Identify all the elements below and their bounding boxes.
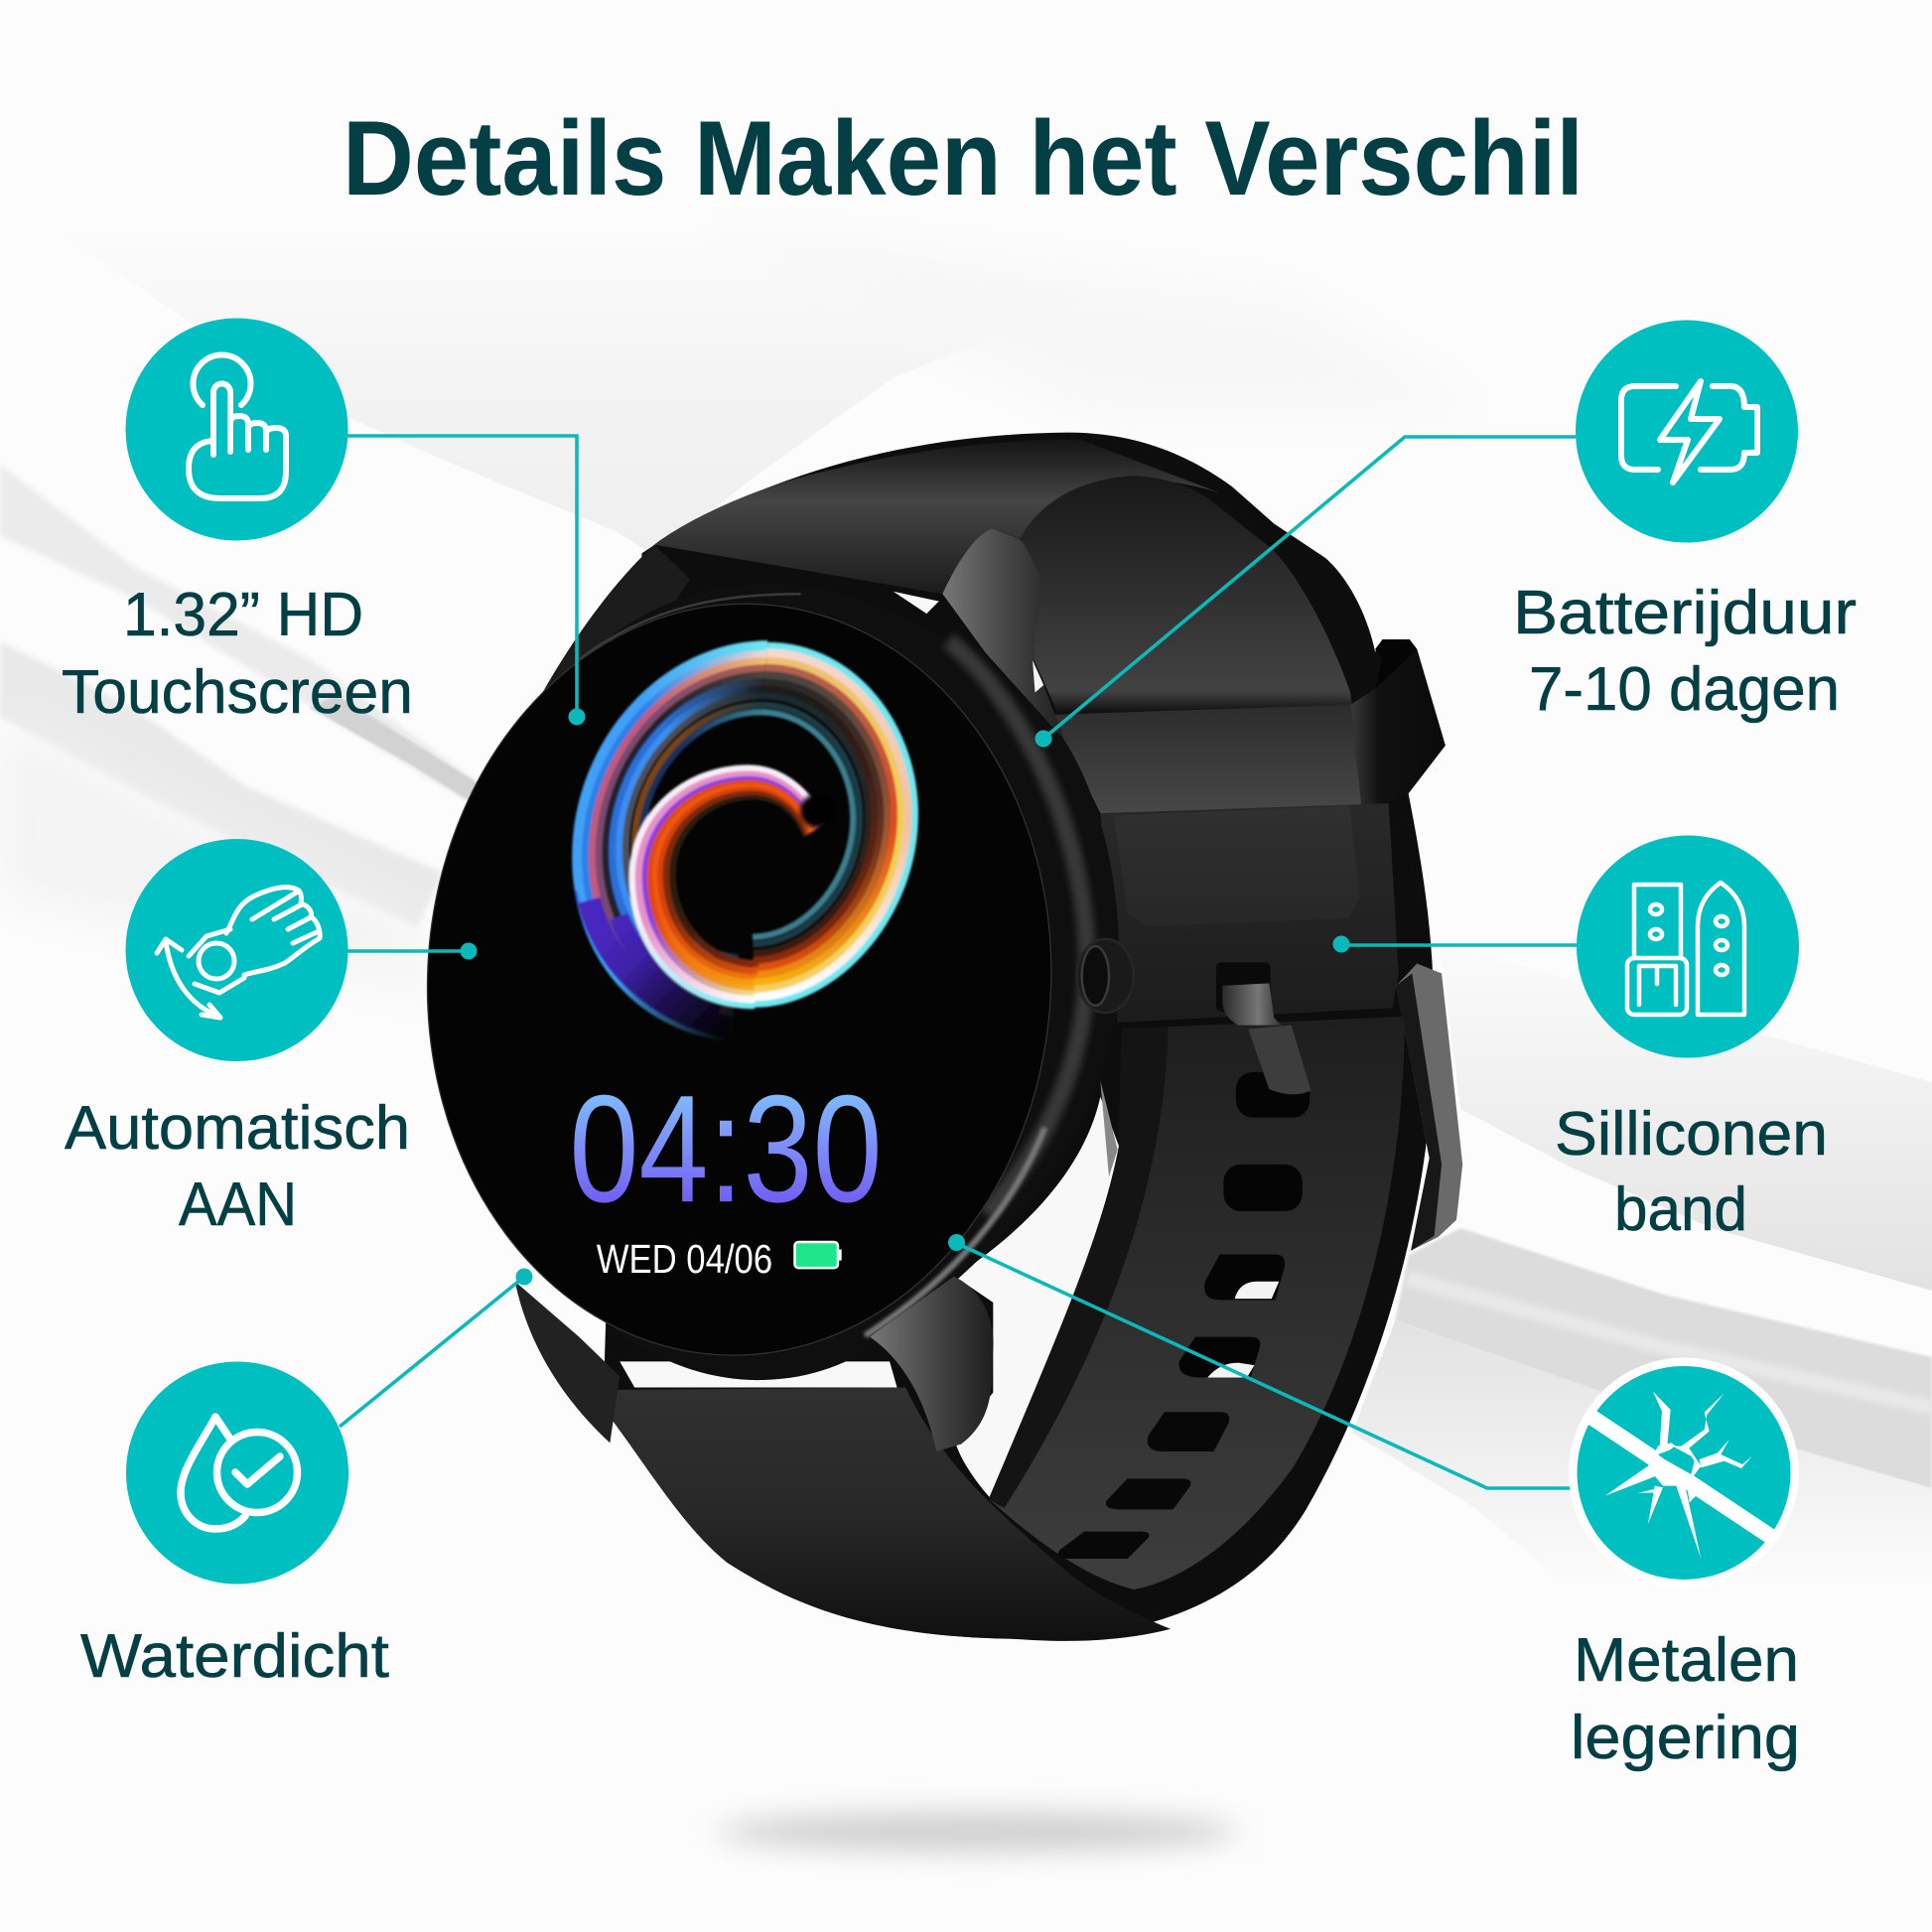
label <box>65 1094 410 1239</box>
lower right lug <box>870 1277 994 1451</box>
upper strap face <box>654 440 1220 594</box>
label: band <box>1614 1175 1747 1244</box>
crown <box>1077 939 1134 1013</box>
leader dot <box>1035 731 1052 747</box>
icon: watch strap parts <box>1627 883 1744 1015</box>
icon disc <box>1577 836 1799 1058</box>
label: 7-10 dagen <box>1529 655 1840 724</box>
icon ring <box>1569 1358 1799 1588</box>
label <box>1555 1100 1828 1244</box>
callout: metal alloy <box>948 1234 1800 1772</box>
upper strap inner <box>1021 476 1351 715</box>
leader dot <box>1332 935 1350 953</box>
leader line <box>1043 437 1576 739</box>
callout: automatic on <box>65 839 477 1239</box>
title: Details Maken het Verschil <box>343 98 1584 217</box>
icon: water drop with check <box>181 1417 298 1529</box>
icon: wrist raise <box>157 888 320 1018</box>
label: Waterdicht <box>80 1622 389 1691</box>
case lugs <box>515 528 1064 1443</box>
label: legering <box>1571 1704 1800 1772</box>
lower front strap <box>610 1387 1171 1641</box>
label: Automatisch <box>65 1094 410 1163</box>
callout: waterproof <box>80 1269 532 1691</box>
icon: touch finger <box>189 355 286 498</box>
case highlights <box>579 594 1087 1335</box>
strap holes <box>1058 1072 1310 1559</box>
icon: charging battery <box>1621 381 1757 483</box>
label: Batterijduur <box>1513 579 1857 647</box>
strap pin keeper <box>1216 962 1311 1094</box>
leader line <box>340 1277 524 1427</box>
label <box>1513 579 1857 724</box>
strap shadow under band <box>990 1027 1169 1508</box>
smartwatch <box>408 433 1462 1641</box>
leader dot <box>568 709 586 725</box>
callout: touchscreen <box>62 318 586 727</box>
label: Metalen <box>1574 1626 1799 1695</box>
side pin <box>1100 1080 1118 1176</box>
leader line <box>956 1243 1571 1488</box>
icon disc <box>126 1362 348 1585</box>
strap with holes <box>990 1017 1405 1589</box>
label: 1.32” HD <box>123 581 363 649</box>
tail fade <box>800 793 835 828</box>
time display: 04:30 <box>569 1063 883 1234</box>
label <box>62 581 413 727</box>
callout: battery life <box>1035 320 1857 747</box>
buckle <box>1396 964 1462 1251</box>
strap keeper loop <box>1051 639 1446 813</box>
label: Silliconen <box>1555 1100 1828 1169</box>
leader dot <box>516 1269 532 1285</box>
icon disc <box>1577 1366 1791 1580</box>
strap mid band <box>1100 803 1399 1023</box>
leader line <box>347 436 577 717</box>
leader dot <box>948 1234 965 1251</box>
date display: WED 04/06 <box>597 1236 772 1282</box>
screen <box>408 588 1070 1371</box>
leader line <box>347 949 469 953</box>
icon disc <box>125 839 347 1061</box>
icon disc <box>125 318 347 540</box>
gaps behind the case <box>620 592 1119 1497</box>
battery indicator <box>795 1242 842 1268</box>
icon disc <box>1576 320 1798 542</box>
label: Touchscreen <box>62 658 413 727</box>
label: AAN <box>179 1171 297 1239</box>
ground shadow <box>718 1812 1238 1852</box>
label <box>1571 1626 1800 1772</box>
watch case <box>428 584 1119 1380</box>
leader dot <box>461 943 477 959</box>
leader line <box>1341 943 1577 947</box>
strap silhouette <box>604 433 1446 1639</box>
callout: silicone band <box>1332 836 1828 1244</box>
icon: cracked glass <box>1584 1392 1777 1559</box>
swirl graphic <box>576 645 915 1039</box>
